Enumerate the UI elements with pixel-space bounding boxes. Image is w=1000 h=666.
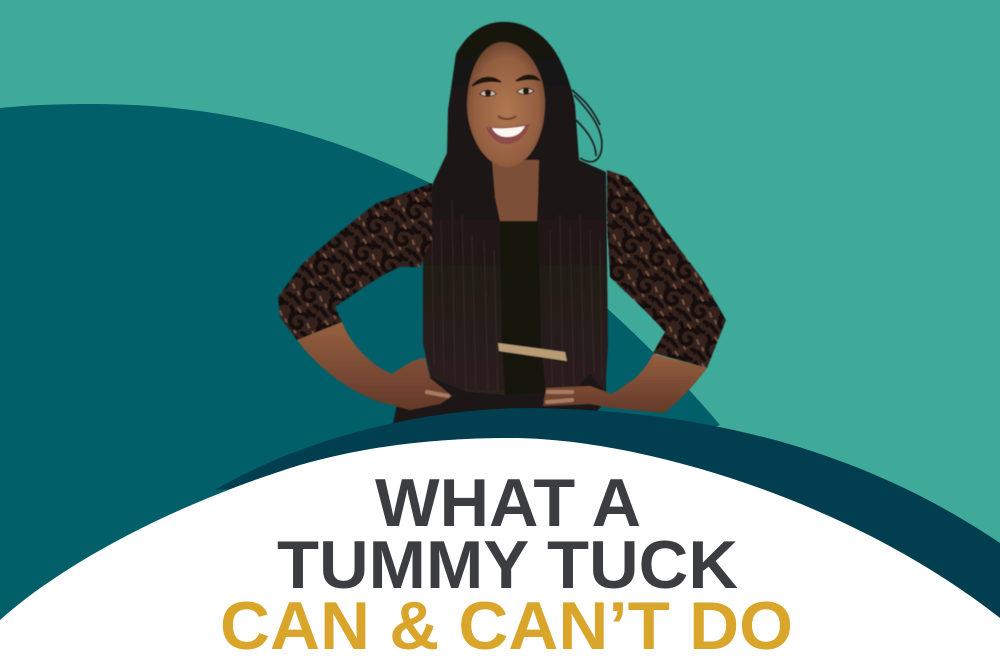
left eye [480,90,496,96]
photo: smiling woman in black lace dress [278,22,726,428]
left lace sleeve [278,183,432,340]
nose [498,116,516,119]
fingers [427,392,572,402]
title line 2: TUMMY TUCK [277,527,738,603]
flyaway hair [572,90,602,162]
dark teal curved shape [0,104,720,640]
left eyebrow [472,77,501,86]
title [220,465,793,664]
hair strands [432,200,602,392]
title line 1: WHAT A [375,465,641,541]
right eye [517,88,534,94]
left forearm and hand [297,322,452,410]
neck [492,160,539,221]
mouth [486,124,530,144]
right eyebrow [516,75,539,81]
navy arc band [215,408,1000,625]
title line 3: CAN & CAN’T DO [220,588,793,664]
hair [423,22,608,395]
right forearm and hand [543,354,707,413]
gold belt [498,343,567,361]
chest panel of dress [500,218,546,395]
teeth [492,126,525,137]
face [467,42,545,167]
right lace sleeve [607,170,726,368]
white title dome [0,438,1000,666]
dress lower body [392,340,606,428]
